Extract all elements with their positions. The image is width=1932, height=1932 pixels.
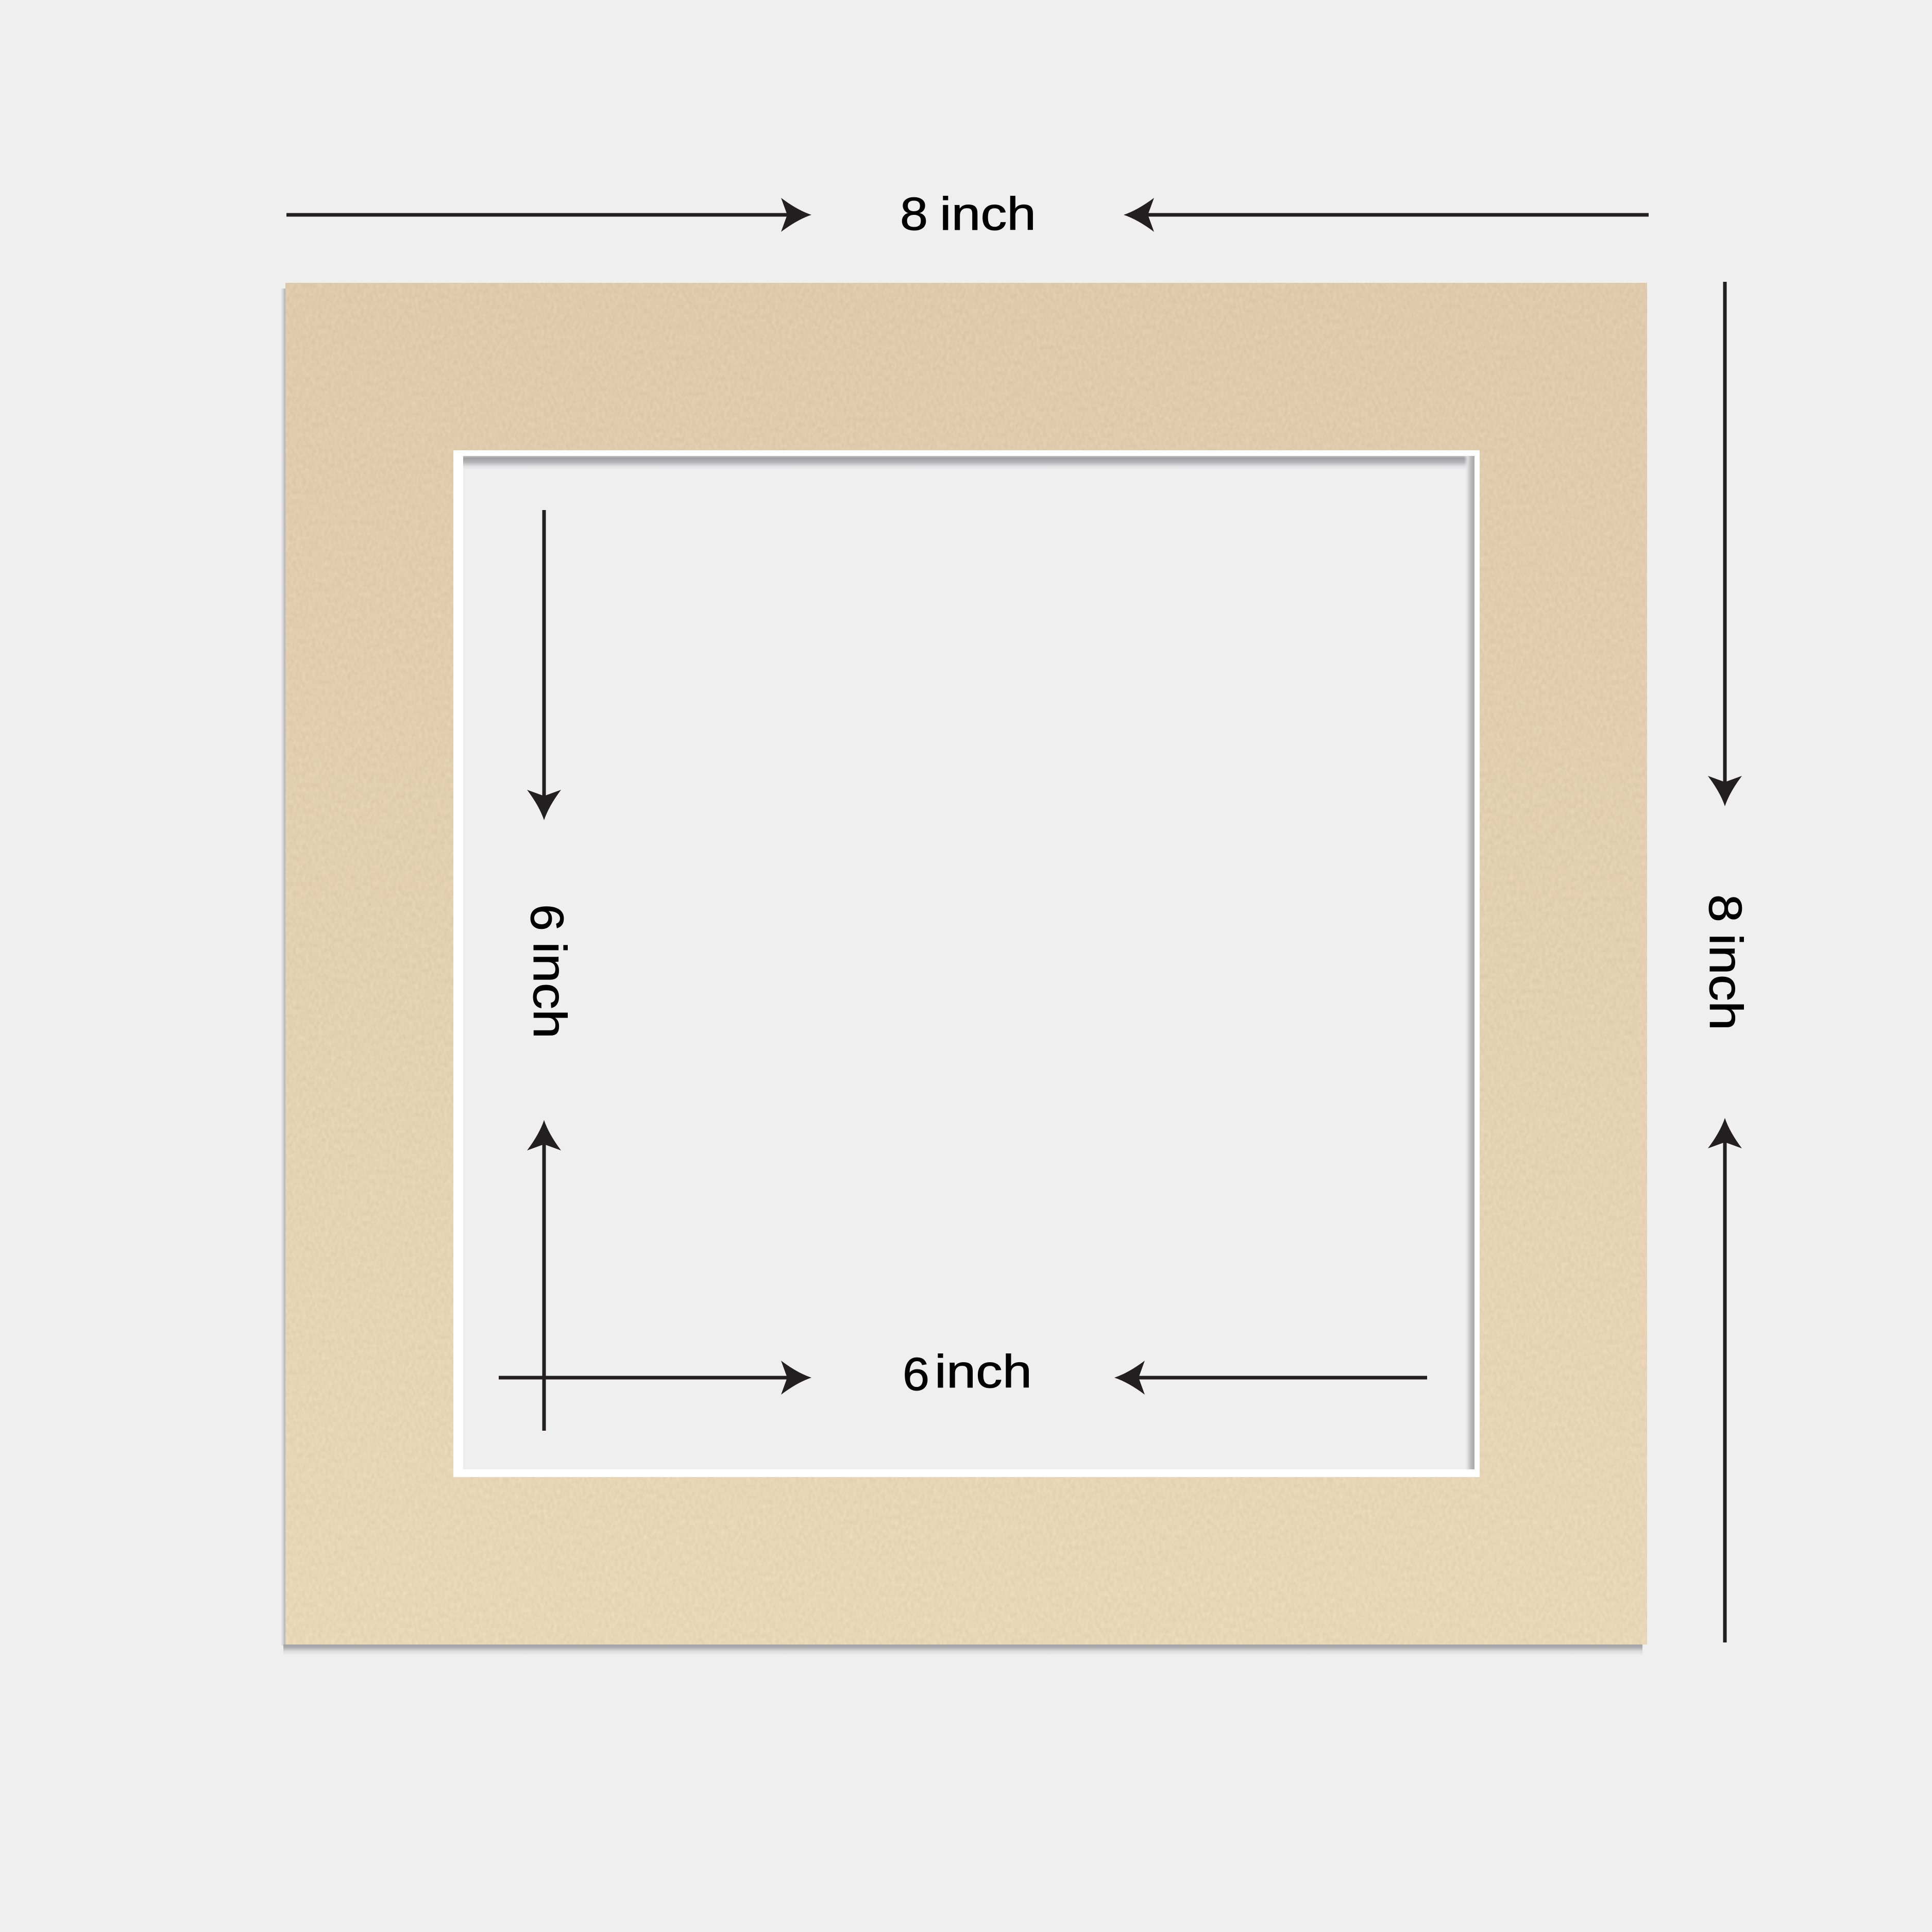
label: top 8 inch: 8 [900, 189, 928, 240]
mat board panel [281, 283, 1647, 1656]
arrow: right side pointing up [1708, 1118, 1742, 1642]
label: inner left 6 inch [521, 904, 575, 1039]
arrow: inner bottom pointing right [499, 1361, 811, 1395]
arrow: inner bottom pointing left [1114, 1361, 1427, 1395]
arrow: top right pointing left [1124, 198, 1649, 232]
label: top 8 inch: inch [940, 189, 1036, 240]
label: inner left 6 inch: inch [523, 942, 575, 1039]
arrow: top left pointing right [286, 198, 811, 232]
arrow: right side pointing down [1708, 282, 1742, 806]
white bevel of the window [453, 450, 1480, 1477]
label: inner bottom 6 inch: 6 [903, 1349, 929, 1400]
label: top 8 inch [900, 189, 1036, 240]
window right inner shadow [1464, 456, 1475, 1469]
label: inner bottom 6 inch: inch [935, 1346, 1032, 1398]
arrow: inner left pointing up [527, 1120, 561, 1431]
label: inner left 6 inch: 6 [521, 904, 572, 931]
label: right 8 inch: inch [1700, 934, 1751, 1030]
mat bottom drop shadow [283, 1645, 1642, 1656]
window top inner shadow [463, 456, 1475, 470]
arrow: inner left pointing down [527, 510, 561, 820]
mat left drop shadow [281, 289, 285, 1646]
mat board with window cut-out [285, 283, 1647, 1645]
label: inner bottom 6 inch [903, 1346, 1032, 1400]
label: right 8 inch [1699, 894, 1751, 1030]
label: right 8 inch: 8 [1699, 894, 1751, 922]
